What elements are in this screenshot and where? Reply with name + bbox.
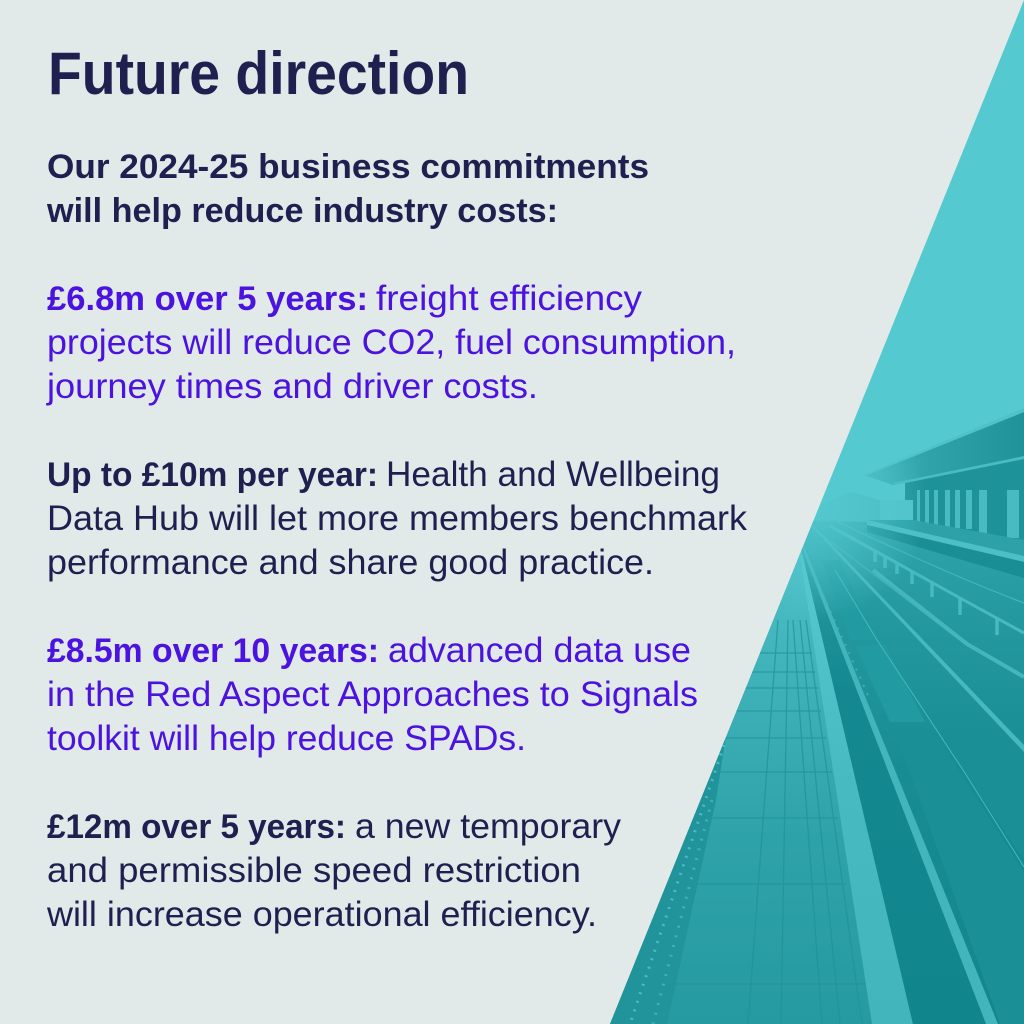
- platform tiles: [600, 548, 872, 1024]
- text block: health and wellbeing: performance and share good practice.: [47, 543, 654, 582]
- text block: red aspect approaches: toolkit will help reduce SPADs.: [47, 719, 526, 758]
- studded platform edge band: [610, 735, 726, 1024]
- subheading: business commitments: Our 2024-25 business commitments: [47, 148, 649, 186]
- dark gutter beside platform: [802, 548, 913, 1024]
- subheading: business commitments: will help reduce industry costs:: [46, 192, 558, 230]
- text block: health and wellbeing: [47, 455, 748, 582]
- distant buildings: [877, 500, 880, 520]
- text block: freight efficiency: freight efficiency: [376, 279, 643, 318]
- platform tile joints: [698, 620, 858, 984]
- sky: [798, 0, 1024, 560]
- text block: speed restriction: a new temporary: [355, 807, 622, 846]
- subheading: business commitments: [46, 148, 649, 230]
- text block: freight efficiency: £6.8m over 5 years:: [47, 280, 368, 318]
- text block: health and wellbeing: Health and Wellbeing: [386, 455, 720, 494]
- light platform edge strip: [799, 548, 913, 1024]
- vanishing-point haze: [802, 427, 910, 602]
- text block: speed restriction: £12m over 5 years:: [47, 808, 346, 846]
- gutter studs: [824, 595, 868, 696]
- station building arches: [904, 459, 1024, 540]
- station canopy roof: [863, 408, 1024, 485]
- text block: health and wellbeing: Data Hub will let more members benchmark: [47, 499, 748, 538]
- track bed: [600, 520, 1024, 1024]
- far rails: [843, 526, 1024, 678]
- text block: freight efficiency: journey times and driver costs.: [46, 367, 538, 406]
- trackside barrier with posts: [830, 526, 1024, 635]
- text block: red aspect approaches: £8.5m over 10 years:: [47, 632, 379, 670]
- text block: red aspect approaches: [47, 631, 698, 758]
- text block: freight efficiency: projects will reduce CO2, fuel consumption,: [47, 323, 736, 362]
- text block: freight efficiency: [46, 279, 736, 406]
- title: Future direction: [48, 40, 469, 107]
- second rail: [824, 538, 1024, 752]
- photo: railway station platform in teal duotone, clipped to a triangle: [600, 0, 1024, 1024]
- text block: speed restriction: and permissible speed restriction: [47, 851, 581, 890]
- text block: speed restriction: will increase operational efficiency.: [46, 895, 597, 934]
- far platform surface and edge: [867, 520, 1024, 557]
- text block: health and wellbeing: Up to £10m per year:: [47, 456, 378, 494]
- main rail: [801, 546, 998, 1024]
- thin cable line: [835, 570, 1024, 867]
- text block: speed restriction: [46, 807, 622, 934]
- text block: red aspect approaches: in the Red Aspect Approaches to Signals: [47, 675, 698, 714]
- text block: red aspect approaches: advanced data use: [388, 631, 691, 670]
- sleeper panels between rails: [880, 697, 924, 722]
